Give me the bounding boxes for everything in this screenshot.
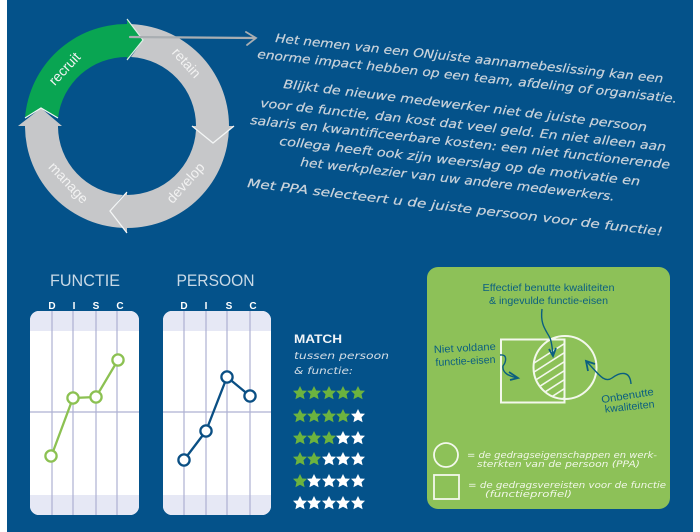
segment: manage: manage bbox=[46, 159, 92, 207]
rating: one star bbox=[293, 474, 365, 487]
DISC labels: I bbox=[205, 301, 208, 312]
label: effective bbox=[482, 282, 615, 307]
match heading bbox=[294, 334, 389, 377]
handwritten text block: Blijkt de nieuwe medewerker niet de juiste persoon bbox=[283, 77, 648, 134]
chart: FUNCTIE bbox=[30, 271, 139, 515]
handwritten text block bbox=[247, 31, 678, 239]
heading: PERSOON: PERSOON bbox=[176, 271, 254, 290]
chart panel bbox=[30, 311, 139, 515]
DISC labels bbox=[180, 301, 257, 312]
segment: recruit bbox=[25, 19, 143, 118]
DISC labels: C bbox=[116, 301, 124, 312]
rating: five stars bbox=[293, 386, 365, 399]
segment: manage bbox=[18, 108, 127, 233]
arrow: to overlap bbox=[542, 309, 556, 356]
rating: no stars bbox=[293, 496, 365, 509]
match heading: MATCH bbox=[294, 334, 342, 346]
heading: FUNCTIE: FUNCTIE bbox=[50, 271, 120, 290]
DISC labels: C bbox=[249, 301, 257, 312]
rating: three stars bbox=[293, 431, 365, 444]
legend: circle: sterkten van de persoon (PPA) bbox=[477, 460, 640, 470]
chart panel bbox=[163, 311, 271, 515]
DISC labels: D bbox=[180, 301, 188, 312]
legend: circle bbox=[434, 443, 657, 470]
legend: square: = de gedragsvereisten voor de functie bbox=[468, 481, 666, 491]
cycle diagram bbox=[18, 19, 234, 233]
legend: square bbox=[434, 475, 666, 500]
arrow: to square bbox=[500, 355, 518, 380]
handwritten text block: het werkplezier van uw andere medewerkers. bbox=[300, 155, 615, 204]
legend: square: (functieprofiel) bbox=[485, 490, 572, 500]
chart: PERSOON bbox=[163, 271, 271, 515]
label: unused qualities: Onbenutte bbox=[600, 386, 655, 406]
arrow: to circle bbox=[586, 361, 631, 384]
match heading: tussen persoon bbox=[294, 351, 389, 362]
label: unused qualities bbox=[600, 386, 655, 416]
label: unmet requirements bbox=[434, 341, 497, 369]
segment: develop: develop bbox=[163, 159, 208, 206]
match heading: & functie: bbox=[294, 366, 353, 377]
label: unused qualities: kwaliteiten bbox=[604, 398, 655, 416]
rating: four stars bbox=[293, 409, 365, 422]
line series bbox=[45, 354, 124, 462]
handwritten text block: collega heeft ook zijn weerslag op de motivatie en bbox=[279, 134, 641, 188]
panel: overlap explanation bbox=[427, 267, 670, 509]
legend: circle: = de gedragseigenschappen en werk- bbox=[467, 451, 657, 461]
DISC labels: S bbox=[226, 301, 233, 312]
handwritten text block: salaris en kwantificeerbare kosten: een niet functionerende bbox=[250, 113, 671, 172]
label: unmet requirements: functie-eisen bbox=[435, 354, 496, 369]
DISC labels: S bbox=[93, 301, 100, 312]
handwritten text block: Het nemen van een ONjuiste aannamebeslissing kan een bbox=[275, 31, 664, 86]
segment: recruit: recruit bbox=[45, 49, 84, 88]
DISC labels: D bbox=[48, 301, 56, 312]
label: effective: Effectief benutte kwaliteiten bbox=[482, 282, 615, 294]
DISC labels bbox=[48, 301, 124, 312]
rating: two stars bbox=[293, 452, 365, 465]
arrow: recruit to text bbox=[130, 32, 256, 45]
line series bbox=[178, 371, 256, 466]
label: unmet requirements: Niet voldane bbox=[434, 341, 496, 356]
handwritten text block: Met PPA selecteert u de juiste persoon voor de functie! bbox=[247, 176, 663, 239]
star ratings bbox=[293, 386, 365, 509]
handwritten text block: voor de functie, dan kost dat veel geld. En niet alleen aan bbox=[260, 96, 667, 154]
DISC labels: I bbox=[73, 301, 76, 312]
label: effective: & ingevulde functie-eisen bbox=[489, 295, 608, 307]
venn diagram bbox=[500, 335, 598, 404]
segment: develop bbox=[110, 126, 234, 233]
segment: retain: retain bbox=[169, 44, 204, 81]
segment: retain bbox=[127, 24, 234, 143]
handwritten text block: enorme impact hebben op een team, afdeling of organisatie. bbox=[257, 47, 678, 106]
